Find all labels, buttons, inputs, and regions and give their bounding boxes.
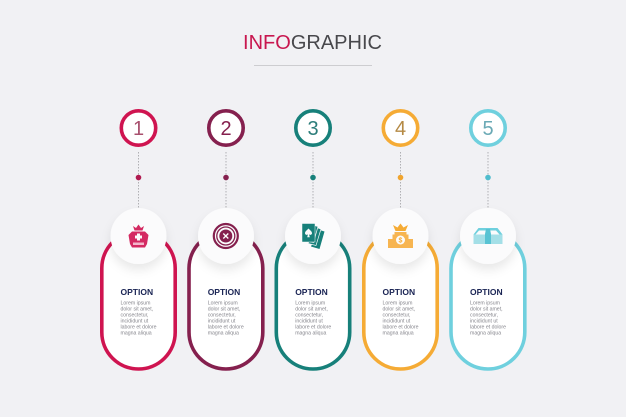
- option heading 3: OPTION: [295, 287, 328, 297]
- icon: playing cards: [302, 224, 324, 249]
- panel: option 3: [276, 111, 350, 369]
- pill card 5: [451, 232, 525, 369]
- icon: crowned bank: [388, 224, 413, 248]
- number badge 3: [296, 111, 330, 145]
- description 5: labore et dolore: [470, 324, 506, 330]
- description 2: Lorem ipsum: [208, 300, 238, 306]
- description 4: dolor sit amet,: [382, 306, 415, 312]
- description 5: dolor sit amet,: [470, 306, 503, 312]
- icon: button: [214, 224, 238, 248]
- description 3: magna aliqua: [295, 330, 326, 336]
- description 1: magna aliqua: [120, 330, 152, 336]
- number badge 2: 2: [220, 118, 232, 140]
- pill card 2: [189, 232, 263, 369]
- number badge 4: 4: [395, 118, 406, 140]
- description 1: labore et dolore: [120, 324, 157, 330]
- description 5: Lorem ipsum: [470, 300, 500, 306]
- description 4: consectetur,: [382, 312, 410, 318]
- option heading 5: OPTION: [470, 287, 503, 297]
- description 1: consectetur,: [120, 312, 148, 318]
- description 4: magna aliqua: [382, 330, 414, 336]
- title: INFOGRAPHIC: [243, 32, 382, 54]
- pill card 4: [364, 232, 437, 369]
- number badge 3: 3: [307, 118, 319, 140]
- description 3: Lorem ipsum: [295, 300, 325, 306]
- number badge 1: 1: [133, 118, 144, 140]
- icon circle 5: [460, 208, 516, 264]
- panel: option 5: [451, 111, 525, 369]
- description 5: consectetur,: [470, 312, 498, 318]
- description 3: consectetur,: [295, 312, 323, 318]
- option heading 4: OPTION: [382, 287, 415, 297]
- icon circle 4: [372, 208, 428, 264]
- description 5: incididunt ut: [470, 318, 498, 324]
- option heading 1: OPTION: [120, 287, 153, 297]
- description 3: labore et dolore: [295, 324, 331, 330]
- icon: crowned bank: $: [399, 238, 403, 244]
- description 2: incididunt ut: [208, 318, 236, 324]
- description 4: incididunt ut: [382, 318, 411, 324]
- number badge 5: 5: [482, 118, 494, 140]
- description 4: Lorem ipsum: [382, 300, 412, 306]
- number badge 1: [121, 111, 156, 145]
- pill card 3: [276, 232, 350, 369]
- number badge 4: [383, 111, 418, 145]
- icon circle 1: [110, 208, 166, 264]
- description 2: labore et dolore: [208, 324, 244, 330]
- pill card 1: [102, 232, 175, 369]
- panel: option 1: [102, 111, 175, 369]
- description 3: dolor sit amet,: [295, 306, 328, 312]
- description 2: magna aliqua: [208, 330, 239, 336]
- description 2: dolor sit amet,: [208, 306, 240, 312]
- description 2: consectetur,: [208, 312, 236, 318]
- description 3: incididunt ut: [295, 318, 323, 324]
- panel: option 4: [364, 111, 437, 369]
- number badge 5: [471, 111, 505, 145]
- description 1: incididunt ut: [120, 318, 149, 324]
- icon circle 3: [285, 208, 341, 264]
- icon circle 2: [198, 208, 254, 264]
- description 4: labore et dolore: [382, 324, 419, 330]
- option heading 2: OPTION: [208, 287, 240, 297]
- number badge 2: [209, 111, 243, 145]
- icon: crown badge: [128, 224, 148, 248]
- icon: money stack: [474, 228, 502, 244]
- description 1: dolor sit amet,: [120, 306, 153, 312]
- description 1: Lorem ipsum: [120, 300, 150, 306]
- panel: option 2: [189, 111, 263, 369]
- description 5: magna aliqua: [470, 330, 501, 336]
